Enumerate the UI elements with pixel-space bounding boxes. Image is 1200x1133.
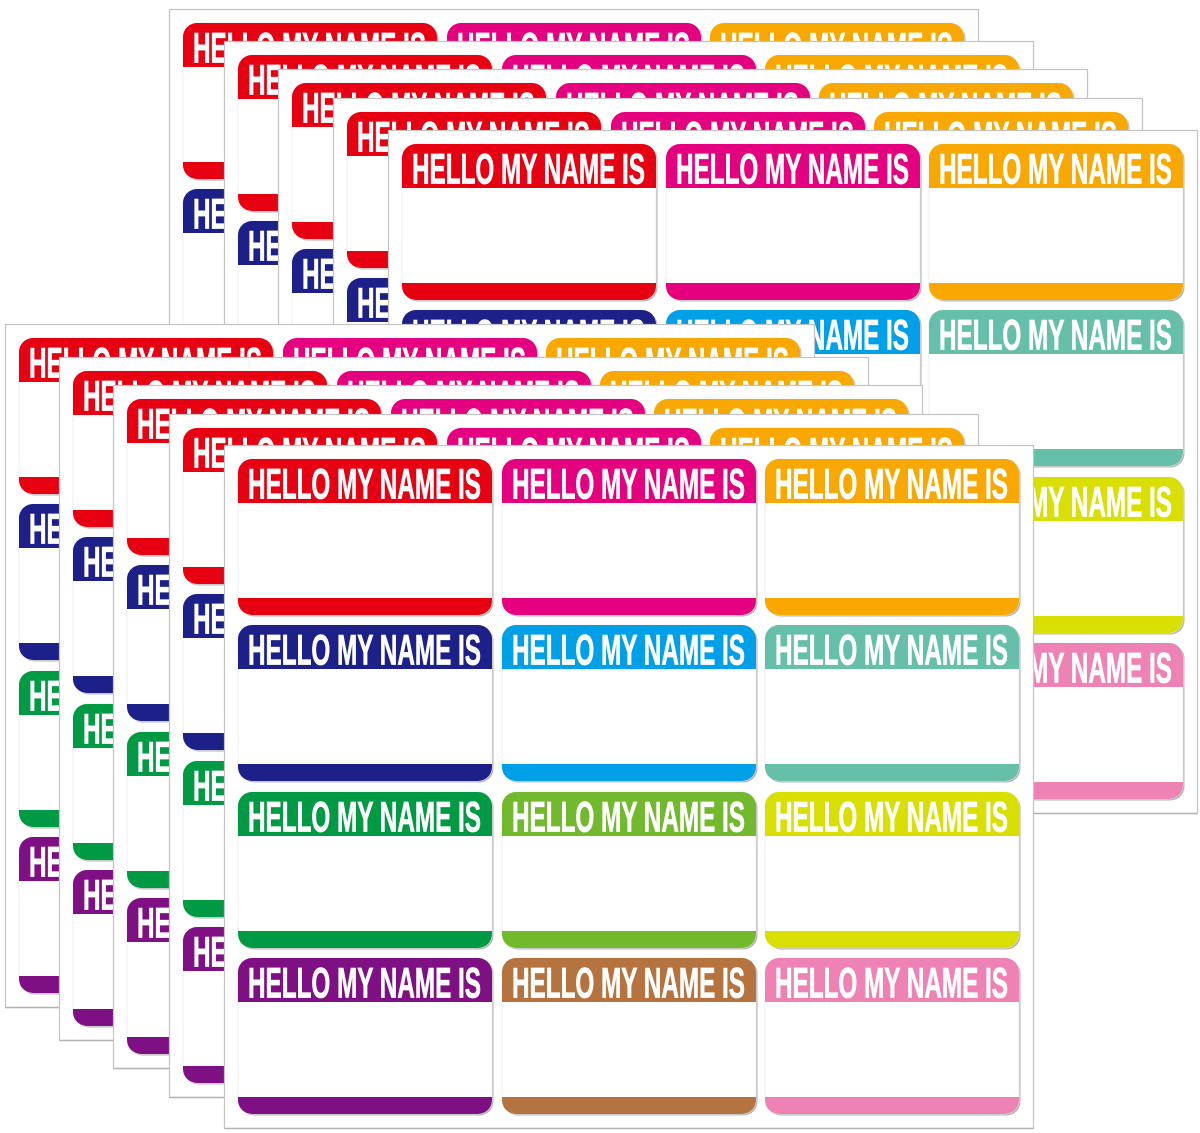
red name tag: HELLO MY NAME IS — [357, 114, 590, 162]
orange name tag — [874, 112, 1130, 270]
magenta name tag: HELLO MY NAME IS — [401, 400, 634, 448]
red name tag — [73, 371, 328, 528]
orange name tag — [765, 55, 1020, 212]
red name tag — [238, 459, 494, 616]
navy name tag — [19, 504, 274, 662]
upper front sheet — [388, 130, 1198, 814]
navy name tag: HELLO MY NAME IS — [137, 566, 370, 614]
yellow name tag: HELLO MY NAME IS — [775, 794, 1008, 842]
navy name tag — [238, 221, 494, 378]
red name tag: HELLO MY NAME IS — [193, 430, 426, 478]
lower sheet 3 — [114, 386, 922, 1068]
magenta name tag: HELLO MY NAME IS — [512, 56, 745, 104]
red name tag: HELLO MY NAME IS — [137, 400, 370, 448]
sky blue name tag: HELLO MY NAME IS — [512, 626, 745, 674]
purple name tag — [127, 898, 382, 1056]
navy name tag — [238, 625, 494, 782]
green name tag — [238, 792, 494, 950]
purple name tag — [19, 837, 274, 994]
green name tag: HELLO MY NAME IS — [193, 762, 426, 810]
orange name tag — [929, 144, 1184, 302]
navy name tag: HELLO MY NAME IS — [248, 626, 481, 674]
magenta name tag — [391, 399, 646, 556]
magenta name tag — [283, 338, 538, 496]
red name tag — [183, 428, 438, 586]
magenta name tag: HELLO MY NAME IS — [512, 460, 745, 508]
navy name tag: HELLO MY NAME IS — [357, 280, 590, 328]
red name tag — [347, 112, 602, 270]
green name tag — [402, 477, 658, 634]
magenta name tag: HELLO MY NAME IS — [457, 24, 690, 72]
sky blue name tag: HELLO MY NAME IS — [676, 312, 909, 360]
green name tag — [183, 761, 438, 918]
red name tag: HELLO MY NAME IS — [248, 460, 481, 508]
green name tag: HELLO MY NAME IS — [29, 672, 262, 720]
magenta name tag — [666, 144, 922, 302]
upper sheet 2 — [224, 42, 1034, 724]
lower stack of sticker sheets — [6, 324, 1034, 1128]
pink name tag — [929, 643, 1184, 800]
red name tag: HELLO MY NAME IS — [302, 84, 535, 132]
orange name tag — [710, 23, 966, 180]
green name tag: HELLO MY NAME IS — [83, 706, 316, 754]
orange name tag: HELLO MY NAME IS — [775, 56, 1008, 104]
purple name tag — [183, 927, 438, 1084]
purple name tag: HELLO MY NAME IS — [412, 644, 645, 692]
red name tag: HELLO MY NAME IS — [29, 340, 262, 388]
lime name tag — [666, 477, 922, 634]
magenta name tag: HELLO MY NAME IS — [676, 146, 909, 194]
orange name tag — [765, 459, 1020, 616]
green name tag: HELLO MY NAME IS — [137, 734, 370, 782]
magenta name tag — [556, 83, 812, 240]
teal name tag — [929, 310, 1184, 468]
orange name tag: HELLO MY NAME IS — [664, 400, 897, 448]
navy name tag: HELLO MY NAME IS — [193, 190, 426, 238]
navy name tag: HELLO MY NAME IS — [302, 250, 535, 298]
orange name tag: HELLO MY NAME IS — [556, 340, 789, 388]
upper sheet 4 — [334, 98, 1142, 782]
lower sheet 4 — [170, 414, 978, 1098]
navy name tag — [127, 565, 382, 722]
lime name tag: HELLO MY NAME IS — [676, 478, 909, 526]
orange name tag: HELLO MY NAME IS — [775, 460, 1008, 508]
green name tag: HELLO MY NAME IS — [412, 478, 645, 526]
brown name tag: HELLO MY NAME IS — [676, 644, 909, 692]
purple name tag: HELLO MY NAME IS — [83, 872, 316, 920]
purple name tag — [402, 643, 658, 800]
orange name tag — [819, 83, 1074, 240]
red name tag — [127, 399, 382, 556]
orange name tag — [546, 338, 802, 496]
yellow name tag — [765, 792, 1020, 950]
magenta name tag — [502, 459, 758, 616]
magenta name tag — [611, 112, 866, 270]
red name tag — [402, 144, 658, 302]
magenta name tag: HELLO MY NAME IS — [566, 84, 799, 132]
sky blue name tag — [666, 310, 922, 468]
purple name tag: HELLO MY NAME IS — [248, 960, 481, 1008]
red name tag — [19, 338, 274, 496]
upper sheet 3 — [278, 70, 1088, 752]
brown name tag: HELLO MY NAME IS — [512, 960, 745, 1008]
red name tag: HELLO MY NAME IS — [83, 372, 316, 420]
sky blue name tag — [502, 625, 758, 782]
red name tag — [238, 55, 494, 212]
magenta name tag — [447, 23, 702, 180]
lower front sheet — [224, 446, 1034, 1128]
brown name tag — [502, 958, 758, 1116]
purple name tag — [238, 958, 494, 1116]
teal name tag: HELLO MY NAME IS — [775, 626, 1008, 674]
yellow name tag — [929, 477, 1184, 634]
orange name tag — [710, 428, 966, 586]
navy name tag: HELLO MY NAME IS — [29, 506, 262, 554]
green name tag — [73, 704, 328, 862]
orange name tag — [654, 399, 910, 556]
navy name tag — [347, 278, 602, 436]
red name tag: HELLO MY NAME IS — [412, 146, 645, 194]
navy name tag: HELLO MY NAME IS — [412, 312, 645, 360]
navy name tag — [402, 310, 658, 468]
navy name tag: HELLO MY NAME IS — [193, 596, 426, 644]
red name tag — [292, 83, 548, 240]
navy name tag — [292, 249, 548, 406]
red name tag — [183, 23, 438, 180]
lower sheet 1 — [6, 324, 814, 1008]
red name tag: HELLO MY NAME IS — [248, 56, 481, 104]
lower sheet 2 — [60, 358, 868, 1040]
navy name tag: HELLO MY NAME IS — [248, 222, 481, 270]
orange name tag: HELLO MY NAME IS — [720, 24, 953, 72]
magenta name tag — [337, 371, 592, 528]
magenta name tag: HELLO MY NAME IS — [621, 114, 854, 162]
green name tag: HELLO MY NAME IS — [248, 794, 481, 842]
magenta name tag: HELLO MY NAME IS — [293, 340, 526, 388]
magenta name tag: HELLO MY NAME IS — [347, 372, 580, 420]
orange name tag: HELLO MY NAME IS — [720, 430, 953, 478]
orange name tag: HELLO MY NAME IS — [610, 372, 843, 420]
magenta name tag: HELLO MY NAME IS — [457, 430, 690, 478]
pink name tag — [765, 958, 1020, 1116]
navy name tag — [183, 594, 438, 752]
orange name tag — [600, 371, 856, 528]
green name tag — [127, 732, 382, 890]
green name tag — [19, 671, 274, 828]
teal name tag — [765, 625, 1020, 782]
lime name tag: HELLO MY NAME IS — [512, 794, 745, 842]
magenta name tag — [447, 428, 702, 586]
magenta name tag — [502, 55, 758, 212]
pink name tag: HELLO MY NAME IS — [775, 960, 1008, 1008]
upper stack of sticker sheets — [170, 10, 1198, 814]
navy name tag — [183, 189, 438, 346]
lime name tag — [502, 792, 758, 950]
navy name tag — [73, 537, 328, 694]
purple name tag: HELLO MY NAME IS — [29, 838, 262, 886]
upper sheet 1 — [170, 10, 978, 692]
brown name tag — [666, 643, 922, 800]
purple name tag — [73, 870, 328, 1028]
navy name tag: HELLO MY NAME IS — [83, 538, 316, 586]
purple name tag: HELLO MY NAME IS — [193, 928, 426, 976]
purple name tag: HELLO MY NAME IS — [137, 900, 370, 948]
red name tag: HELLO MY NAME IS — [193, 24, 426, 72]
